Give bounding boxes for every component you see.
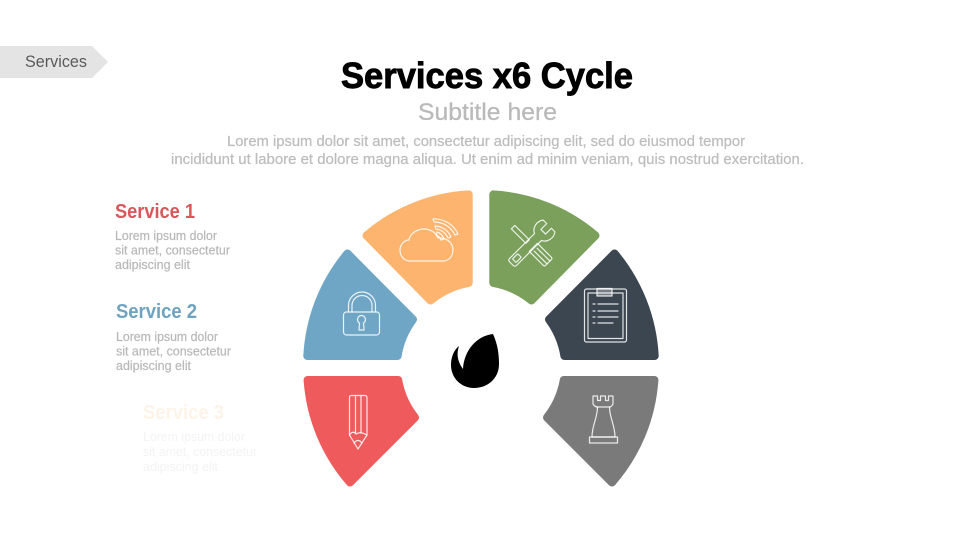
service 2 text block: Lorem ipsum dolor [116, 330, 218, 344]
service 2 text block: Service 2 [116, 301, 197, 323]
service 3 text block (fading in): adipiscing elit [143, 460, 219, 474]
service 2 text block [116, 301, 231, 373]
center logo: black leaf [451, 334, 499, 388]
segment: blue with lock icon [307, 254, 413, 356]
icon: pencil [350, 396, 367, 449]
segment: gray with rook icon [547, 380, 654, 482]
segment: orange with cloud icon [366, 194, 469, 300]
service 1 text block: Service 1 [115, 201, 195, 223]
intro text: Lorem ipsum dolor sit amet, consectetur adipiscing elit, sed do eiusmod tempor [227, 133, 745, 150]
title: Services x6 Cycle [341, 55, 633, 96]
segment: dark slate with clipboard icon [549, 254, 655, 356]
icon: wrench and screwdriver [504, 219, 556, 271]
icon: cloud with signal [400, 219, 458, 261]
service 1 text block: adipiscing elit [115, 258, 191, 272]
service 1 text block: sit amet, consectetur [115, 244, 230, 258]
service 3 text block (fading in) [143, 402, 257, 474]
segment: red with pencil icon [308, 380, 415, 482]
icon: chess rook [590, 396, 618, 443]
service 1 text block: Lorem ipsum dolor [115, 229, 217, 243]
icon: clipboard [584, 288, 626, 342]
service 3 text block (fading in): Service 3 [143, 402, 224, 424]
subtitle: Subtitle here [418, 99, 557, 126]
service 2 text block: adipiscing elit [116, 359, 192, 373]
tag: Services: Services [25, 52, 87, 71]
tag: Services [0, 46, 108, 78]
service 3 text block (fading in): sit amet, consectetur [143, 445, 257, 459]
intro text: incididunt ut labore et dolore magna aliqua. Ut enim ad minim veniam, quis nostrud exercitation. [171, 151, 804, 168]
service 3 text block (fading in): Lorem ipsum dolor [143, 430, 245, 444]
service 1 text block [115, 201, 230, 272]
icon: padlock [344, 292, 380, 335]
service 2 text block: sit amet, consectetur [116, 344, 231, 358]
intro text [171, 133, 804, 168]
segment: green with tools icon [493, 194, 596, 300]
